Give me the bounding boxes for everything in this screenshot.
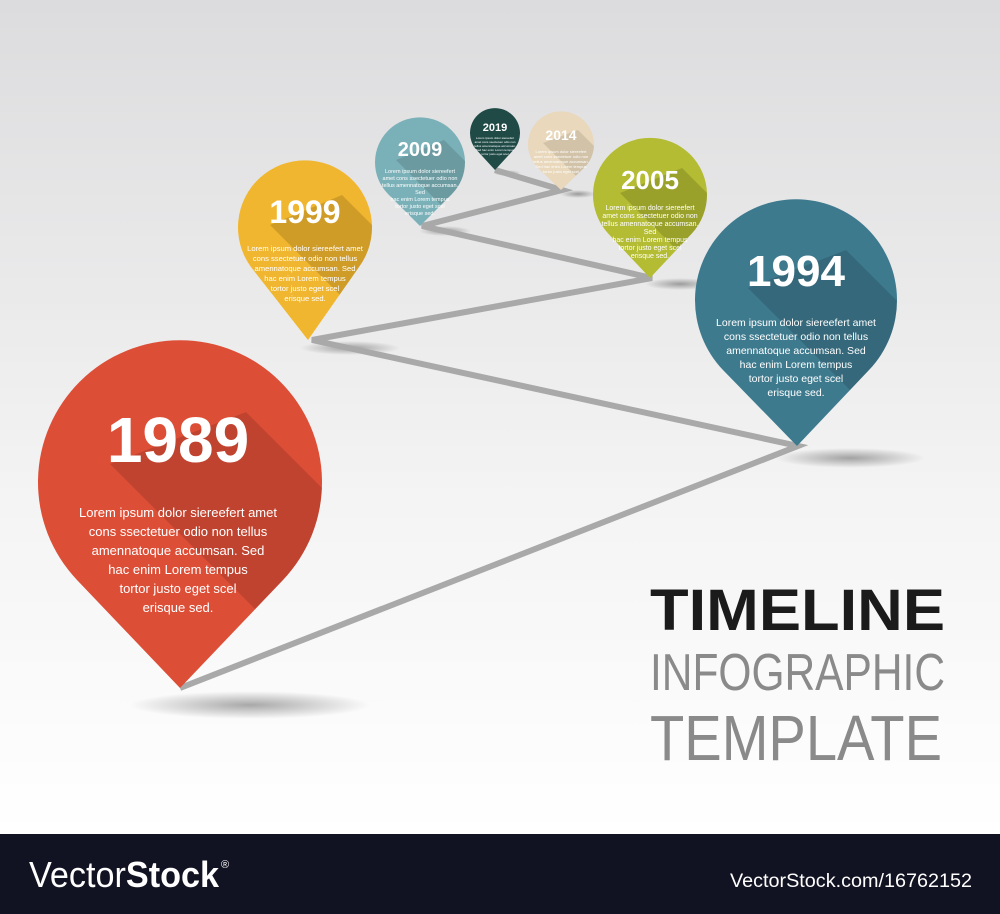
pin: 2005: hac enim Lorem tempus — [612, 237, 688, 244]
pin: 1999 — [238, 160, 372, 340]
pin: 2014: amet cons ssectetuer odio non — [534, 154, 588, 159]
footer: VectorStock — [29, 854, 220, 895]
pin: 2019: tortor justo eget scel — [481, 152, 509, 156]
pin: 1994: hac enim Lorem tempus — [740, 359, 852, 371]
pin: 1994: Lorem ipsum dolor siereefert amet — [716, 317, 876, 329]
pin: 2014 — [528, 111, 594, 190]
timeline path — [180, 170, 798, 688]
pin: 1994: amennatoque accumsan. Sed — [726, 345, 866, 357]
title: TIMELINE — [650, 578, 945, 643]
pin: 1999: amennatoque accumsan. Sed — [255, 264, 355, 273]
pin: 2019: Lorem ipsum dolor siereefert — [476, 136, 514, 140]
pin: 1999: hac enim Lorem tempus — [264, 274, 346, 283]
pin: 2009: 2009 — [398, 139, 442, 161]
footer — [0, 834, 1000, 914]
pin: 1999: Lorem ipsum dolor siereefert amet — [247, 244, 364, 253]
pin: 1989: erisque sed. — [143, 600, 213, 615]
pin: 2009: tortor justo eget scel — [395, 204, 445, 210]
pin: 2019: amet cons ssectetuer odio non — [475, 140, 516, 144]
pin: 1994 — [695, 199, 897, 446]
pin: 2019: tellus amennatoque accumsan. — [474, 144, 516, 148]
pin: 1989: amennatoque accumsan. Sed — [92, 543, 264, 558]
pin: 1989 — [38, 340, 322, 688]
pin: 2014: 2014 — [545, 127, 577, 143]
pin: 2014: tortor justo eget scel — [543, 169, 579, 174]
pin: 1999: erisque sed. — [284, 294, 326, 303]
pin: 2019: Sed hac enim Lorem tempus — [476, 148, 515, 152]
title: TEMPLATE — [650, 702, 942, 774]
pin: 1989: Lorem ipsum dolor siereefert amet — [79, 505, 277, 520]
pin: 1994: tortor justo eget scel — [749, 373, 843, 385]
pin: 2009: tellus amennatoque accumsan. — [382, 183, 459, 189]
pin: 2005: Lorem ipsum dolor siereefert — [605, 205, 695, 212]
title — [650, 578, 945, 774]
pin: 2009: erisque sed. — [405, 211, 435, 217]
pin: 2014: Sed hac enim Lorem tempus — [535, 164, 587, 169]
pin: 2009: hac enim Lorem tempus — [390, 197, 450, 203]
shadows — [130, 170, 925, 719]
pin: 1989: cons ssectetuer odio non tellus — [89, 524, 268, 539]
pin: 2019: 2019 — [483, 122, 507, 134]
pin: 1994: erisque sed. — [767, 387, 825, 399]
pin: 1999: cons ssectetuer odio non tellus — [253, 254, 357, 263]
pin: 1989: 1989 — [107, 404, 249, 476]
pin: 1994: 1994 — [747, 247, 845, 296]
pin: 1994: cons ssectetuer odio non tellus — [724, 331, 868, 343]
pin: 1999: tortor justo eget scel — [271, 284, 339, 293]
pin: 2005: tellus amennatoque accumsan. — [602, 221, 698, 228]
footer: VectorStock.com/16762152 — [730, 871, 972, 892]
pin: 2019 — [470, 108, 520, 170]
pin: 1989: hac enim Lorem tempus — [108, 562, 248, 577]
pin: 2005 — [593, 138, 707, 278]
pin: 2009: Lorem ipsum dolor siereefert — [385, 169, 455, 175]
pin: 2009 — [375, 117, 465, 226]
pin: 2005: Sed — [644, 229, 656, 236]
pin: 2005: 2005 — [621, 165, 679, 195]
pin: 1999: 1999 — [269, 194, 341, 230]
pin: 2005: erisque sed. — [631, 253, 669, 260]
pin: 2009: Sed — [415, 190, 425, 196]
footer: ® — [221, 859, 229, 871]
pin: 2005: amet cons ssectetuer odio non — [602, 213, 698, 220]
pin: 2014: Lorem ipsum dolor siereefert — [536, 149, 587, 154]
pin: 2014: tellus amennatoque accumsan. — [533, 159, 589, 164]
pin: 2005: tortor justo eget scel — [618, 245, 682, 252]
pin: 1989: tortor justo eget scel — [119, 581, 237, 596]
pin: 2009: amet cons ssectetuer odio non — [383, 176, 457, 182]
